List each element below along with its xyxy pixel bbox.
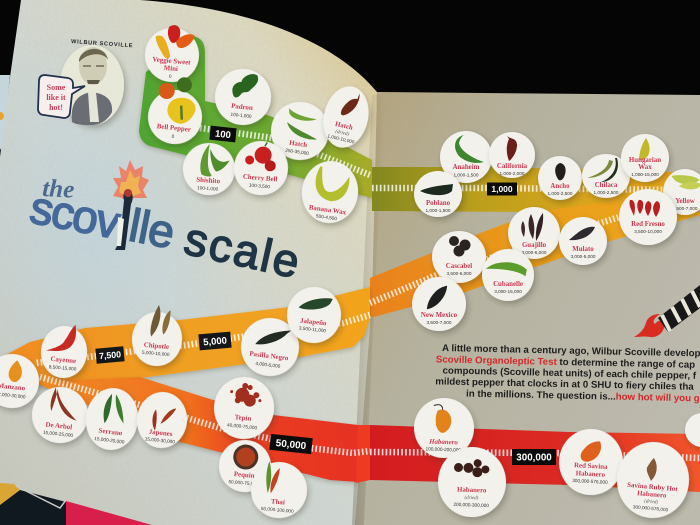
circle: Chilaca (582, 154, 630, 198)
circle: Habanero (dried): Habanero (457, 486, 487, 495)
text block: introduction: A little more than a century ago, Wilbur Scoville develop (442, 343, 700, 359)
circle: Cherry Bell: Cherry Bell (243, 173, 278, 183)
circle: Poblano (414, 171, 462, 217)
circle: Mulato: Mulato (572, 246, 594, 253)
circle: Mulato (559, 217, 607, 265)
circle: Japones: 15,000-30,000 (145, 436, 176, 444)
text block: introduction: Scoville Organoleptic Test to determine the range of cap (436, 354, 695, 371)
circle: Anaheim (440, 131, 492, 183)
circle: New Mexico: 3,500-7,000 (426, 320, 452, 325)
badge: 1,000: 1,000 (491, 184, 513, 194)
circle: De Arbol: 15,000-25,000 (43, 430, 74, 438)
circle: Savina Ruby Hot Habanero (dried): Habanero (637, 490, 667, 500)
circle: Japones (134, 390, 190, 450)
speech bubble: Some like it hot!: like it (46, 93, 66, 102)
circle: Serrano: Serrano (98, 427, 123, 437)
circle: Yellow: Yellow (675, 198, 695, 205)
circle: New Mexico: New Mexico (421, 312, 458, 319)
circle: Red Savina Habanero: Habanero (576, 470, 606, 479)
circle: Jalapeno (284, 284, 344, 346)
circle: Cubanelle: Cubanelle (493, 281, 523, 288)
circle: Savina Ruby Hot Habanero (dried) (614, 439, 692, 521)
circle: Cubanelle: 3,000-15,000 (494, 289, 522, 294)
circle: Cayenne (39, 322, 89, 380)
ribbon: orange, 5,000 and 7,500 tier (0, 287, 370, 385)
circle: Tepin: Tepin (234, 414, 252, 423)
circle: Poblano: Poblano (426, 200, 451, 207)
circle: California: California (497, 163, 528, 170)
circle: Hatch (dried) (318, 82, 374, 152)
circle: Cherry Bell: 100-3,500 (249, 183, 271, 189)
circle: Cascabel (432, 231, 486, 283)
circle: Hatch (dried): 1,000-10,000 (327, 133, 355, 145)
badge: 5,000: 5,000 (203, 335, 227, 348)
circle: Anaheim: 1,000-1,500 (453, 172, 479, 178)
circle: Pequin: Pequin (234, 471, 255, 480)
circle: Jalapeno: Jalapeño (300, 318, 327, 327)
circle: Hungarian Wax: Wax (638, 164, 652, 171)
circle: Shishito: 100-1,000 (197, 185, 219, 192)
speech bubble: Some like it hot! (38, 75, 85, 118)
badge: 7,500: 7,500 (99, 349, 122, 361)
badge: 1,000 (487, 182, 517, 196)
circle: Hatch: Hatch (289, 140, 308, 149)
circle: Savina Ruby Hot Habanero (dried): 300,000-576,000 (633, 504, 669, 512)
circle: Cascabel: 3,500-6,000 (446, 271, 472, 276)
circle: California: 1,000-2,000 (499, 171, 525, 176)
circle: Thai: Thai (271, 498, 285, 507)
circle: Yellow: 3,500-7,000 (672, 206, 698, 211)
circle: Ancho: 1,000-2,500 (547, 191, 573, 196)
circle: Veggie Sweet Mini: Veggie Sweet (152, 56, 191, 67)
circle: Hatch (dried): Hatch (334, 121, 354, 132)
text block: introduction: in the millions. The question is...how hot will you g (466, 389, 700, 404)
circle: Ancho (538, 156, 582, 200)
circle: Hungarian Wax: 1,000-15,000 (631, 172, 659, 177)
circle: Guajillo (508, 207, 560, 259)
title: the Scoville scale (26, 175, 304, 288)
ribbon: red, 300,000 tier (370, 425, 700, 492)
circle: Thai: 50,000-100,000 (261, 506, 294, 514)
text block: introduction: compounds (Scoville heat units) of each chile pepper, f (442, 366, 697, 382)
gutter shadow (352, 95, 384, 525)
circle: Veggie Sweet Mini: Mini (163, 65, 178, 73)
badge: 300,000 (512, 449, 556, 465)
circle: Yellow (663, 169, 700, 215)
circle: Chipotle: 5,000-10,000 (142, 350, 170, 357)
portrait: Wilbur Scoville (60, 45, 124, 125)
ribbon: gold to orange, 3,000 tier (370, 190, 700, 318)
circle: Cherry Bell (232, 139, 290, 197)
circle: Red Fresno: 3,500-10,000 (634, 229, 662, 234)
circle: Chipotle: Chipotle (143, 342, 169, 351)
circle: Guajillo: 3,000-6,000 (521, 250, 547, 255)
circle: Red Savina Habanero (557, 427, 625, 497)
circle: Pasilla Negro: Pasilla Negro (249, 351, 289, 362)
ribbon tick marks (35, 128, 700, 458)
circle: Bell Pepper (145, 74, 206, 147)
title word: scov: scov (26, 181, 124, 249)
icon: zebra stripes (658, 285, 700, 332)
circle: Habanero: 100,000-200,000 (425, 446, 461, 453)
circle: Red Fresno: Red Fresno (631, 221, 665, 228)
corner artwork (0, 483, 152, 525)
circle: Hungarian Wax: Hungarian (629, 157, 661, 164)
circle: Hatch: 250-35,000 (285, 148, 310, 156)
speech bubble: Some like it hot!: hot! (49, 103, 63, 112)
text block: introduction (435, 343, 700, 404)
badge: 50,000 (269, 434, 313, 454)
circle: Banana Wax (298, 157, 362, 227)
circle: Tepin (211, 374, 277, 442)
circle: Chipotle (130, 303, 185, 368)
circle: Tepin: 40,000-75,000 (227, 422, 258, 431)
badge: 100 (209, 126, 237, 142)
icon: red flame logo (634, 314, 665, 337)
title word: the: the (42, 175, 75, 204)
circle: Hungarian Wax (621, 134, 669, 182)
circle: Red Fresno (619, 189, 677, 245)
circle: Habanero (dried): (dried) (464, 496, 479, 501)
circle: Habanero (dried): 200,000-300,000 (453, 502, 489, 508)
circle: Padron: Padron (231, 103, 253, 112)
speech bubble: Some like it hot!: Some (47, 83, 66, 92)
circle: Veggie Sweet Mini: 0 (169, 74, 172, 79)
circle: Savina Ruby Hot Habanero (dried): Savina Ruby Hot (627, 482, 679, 493)
circle: Shishito (181, 141, 237, 197)
circle: next pepper, cropped (685, 413, 700, 447)
circle: Chilaca: Chilaca (595, 182, 618, 189)
circle: Poblano: 1,000-1,500 (425, 208, 451, 213)
neighbouring page sliver (0, 75, 10, 150)
badge: 50,000: 50,000 (275, 438, 307, 452)
circle: Cascabel: Cascabel (446, 263, 472, 270)
circle: Padron: 100-1,000 (230, 112, 252, 119)
circle: Shishito: Shishito (196, 177, 221, 185)
circle: Habanero (dried) (437, 446, 507, 518)
circle: Savina Ruby Hot Habanero (dried): (dried) (644, 499, 659, 506)
circle: California (489, 132, 535, 178)
circle: Banana Wax: 500-4,500 (316, 213, 338, 221)
panel: right page (355, 92, 700, 525)
badge: 100: 100 (214, 129, 231, 141)
circle: Jalapeno: 3,500-11,000 (299, 326, 327, 333)
badge: 7,500 (95, 346, 125, 364)
circle: Serrano: 15,000-20,000 (94, 436, 125, 445)
circle: Hatch (dried): (dried) (335, 130, 350, 138)
circle: Red Savina Habanero: Red Savina (574, 462, 608, 471)
text block: introduction: mildest pepper that clocks in at 0 SHU to fiery chiles tha (435, 376, 694, 393)
circle: New Mexico (412, 277, 466, 331)
circle: De Arbol (29, 384, 91, 446)
circle: Pequin (217, 438, 273, 494)
circle: Banana Wax: Banana Wax (308, 204, 347, 216)
circle: Habanero (413, 397, 475, 459)
circle: Cubanelle (482, 249, 534, 301)
ribbon: orange to red, 15,000 to 50,000 tier (0, 366, 358, 482)
circle: Manzano (0, 351, 42, 411)
circle: Hatch (267, 98, 333, 164)
ribbon: green to olive, mild peppers (139, 36, 372, 198)
label: Wilbur Scoville: WILBUR SCOVILLE (71, 39, 133, 49)
circle: Bell Pepper: 0 (171, 134, 175, 139)
circle: Cayenne: Cayenne (50, 356, 76, 365)
icon: burning match (113, 160, 149, 250)
circle: Guajillo: Guajillo (522, 242, 547, 249)
circle: Padron (212, 66, 274, 128)
title word: lle: lle (125, 199, 179, 258)
badge: 5,000 (198, 332, 232, 350)
title word: scale: scale (180, 212, 304, 288)
circle: Chilaca: 1,000-2,500 (593, 190, 619, 195)
circle: Habanero: Habanero (428, 438, 459, 447)
circle: Pasilla Negro (238, 315, 302, 379)
circle: Veggie Sweet Mini (143, 23, 202, 84)
circle: Thai (249, 460, 309, 520)
circle: Mulato: 3,000-5,000 (570, 254, 596, 259)
circle: Pequin: 50,000-75,000 (228, 479, 259, 487)
circle: Anaheim: Anaheim (453, 164, 480, 171)
circle: Pasilla Negro: 4,000-6,000 (255, 361, 281, 369)
badge: 300,000: 300,000 (516, 453, 552, 464)
circle: De Arbol: De Arbol (45, 422, 72, 431)
panel: left page (0, 0, 377, 525)
circle: Serrano (82, 385, 142, 453)
circle: Ancho: Ancho (550, 183, 570, 190)
circle: Bell Pepper: Bell Pepper (156, 123, 191, 134)
circle: Cayenne: 8,500-15,000 (49, 364, 77, 372)
ribbon: olive to gold, 1,000 tier (372, 167, 700, 243)
circle: Japones: Japones (148, 429, 173, 438)
circle: Red Savina Habanero: 300,000-576,000 (572, 478, 608, 485)
